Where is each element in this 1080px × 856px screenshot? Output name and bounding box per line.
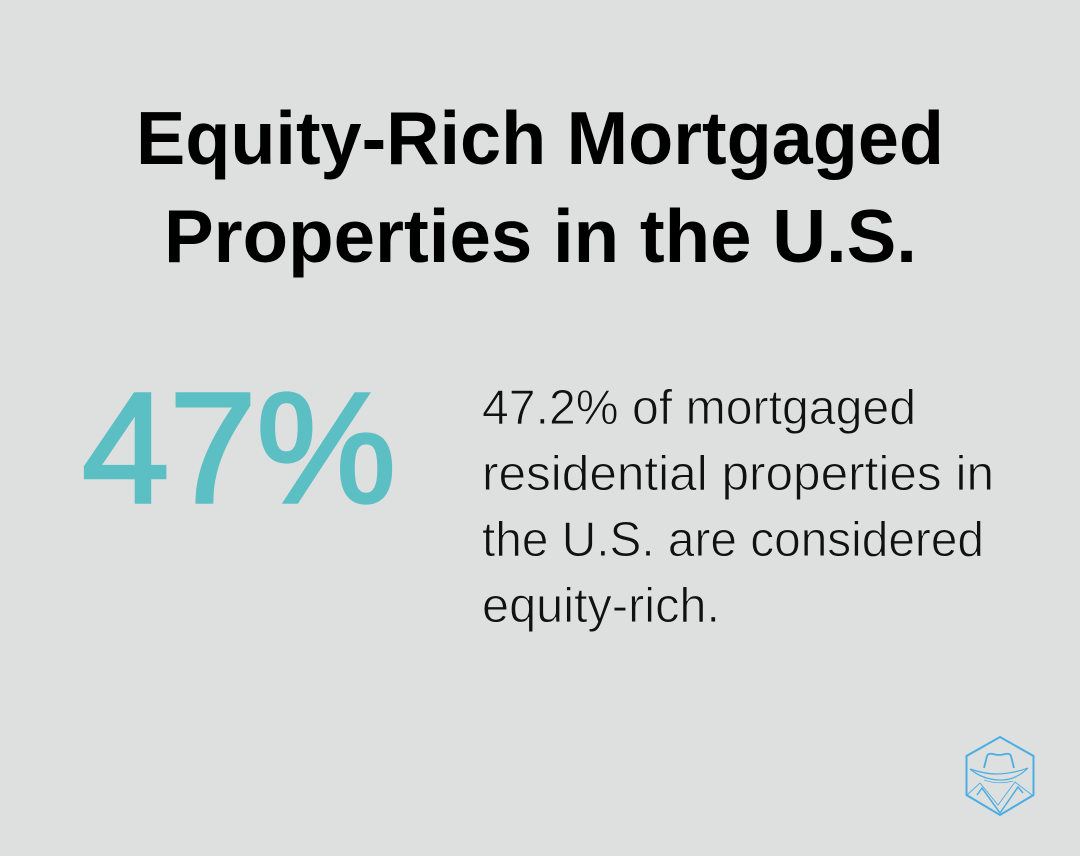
- title: Properties in the U.S.: [164, 194, 917, 278]
- description text: equity-rich.: [482, 579, 720, 633]
- title: [136, 96, 944, 278]
- description text: the U.S. are considered: [482, 513, 984, 567]
- description text: [482, 381, 994, 633]
- big statistic: 47%: 47%: [82, 361, 396, 536]
- description text: residential properties in: [482, 447, 994, 501]
- title: Equity-Rich Mortgaged: [136, 96, 944, 180]
- icon: hexagon logo with hat and coat: [966, 737, 1034, 815]
- description text: 47.2% of mortgaged: [482, 381, 916, 435]
